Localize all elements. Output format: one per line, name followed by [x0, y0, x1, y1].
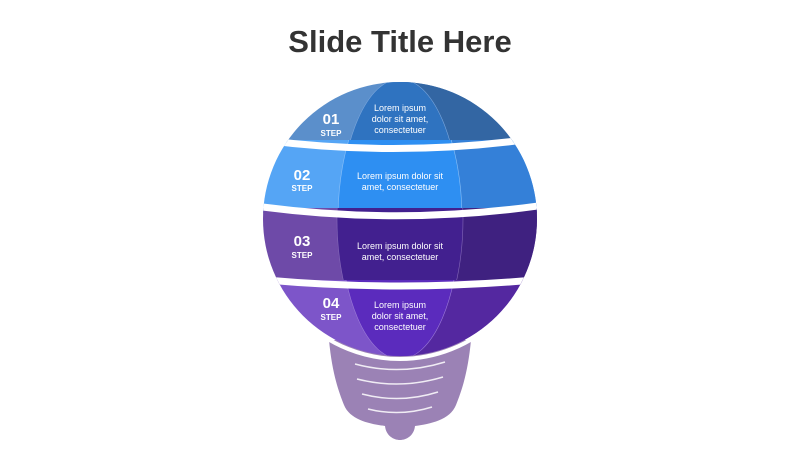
bulb globe — [263, 82, 537, 356]
step 4: dolor sit amet, — [372, 311, 428, 321]
step 1 — [321, 103, 428, 138]
band 2 — [263, 140, 537, 213]
step 1: STEP — [321, 129, 342, 138]
step 4: 04 — [323, 295, 340, 312]
step 4 — [321, 295, 428, 332]
step 3: 03 — [294, 233, 310, 250]
step 1: dolor sit amet, — [372, 114, 428, 124]
step 2: Lorem ipsum dolor sit — [357, 171, 444, 181]
step 1: 01 — [323, 111, 339, 128]
step 1: Lorem ipsum — [374, 103, 426, 113]
band 3 — [263, 208, 537, 285]
bulb base — [329, 340, 471, 440]
step 3 — [292, 233, 444, 262]
step 1: consectetuer — [374, 125, 426, 135]
step 4: consectetuer — [374, 322, 426, 332]
band 4 — [277, 280, 523, 356]
step 3: STEP — [292, 251, 313, 260]
step 3: Lorem ipsum dolor sit — [357, 241, 444, 251]
step 4: STEP — [321, 313, 342, 322]
step 2: STEP — [292, 184, 313, 193]
step 4: Lorem ipsum — [374, 300, 426, 310]
step 3: amet, consectetuer — [362, 252, 438, 262]
band 1 — [286, 82, 514, 143]
step 2: amet, consectetuer — [362, 182, 438, 192]
step 2: 02 — [294, 167, 310, 184]
step 2 — [292, 167, 444, 193]
title: Slide Title Here — [288, 24, 512, 59]
